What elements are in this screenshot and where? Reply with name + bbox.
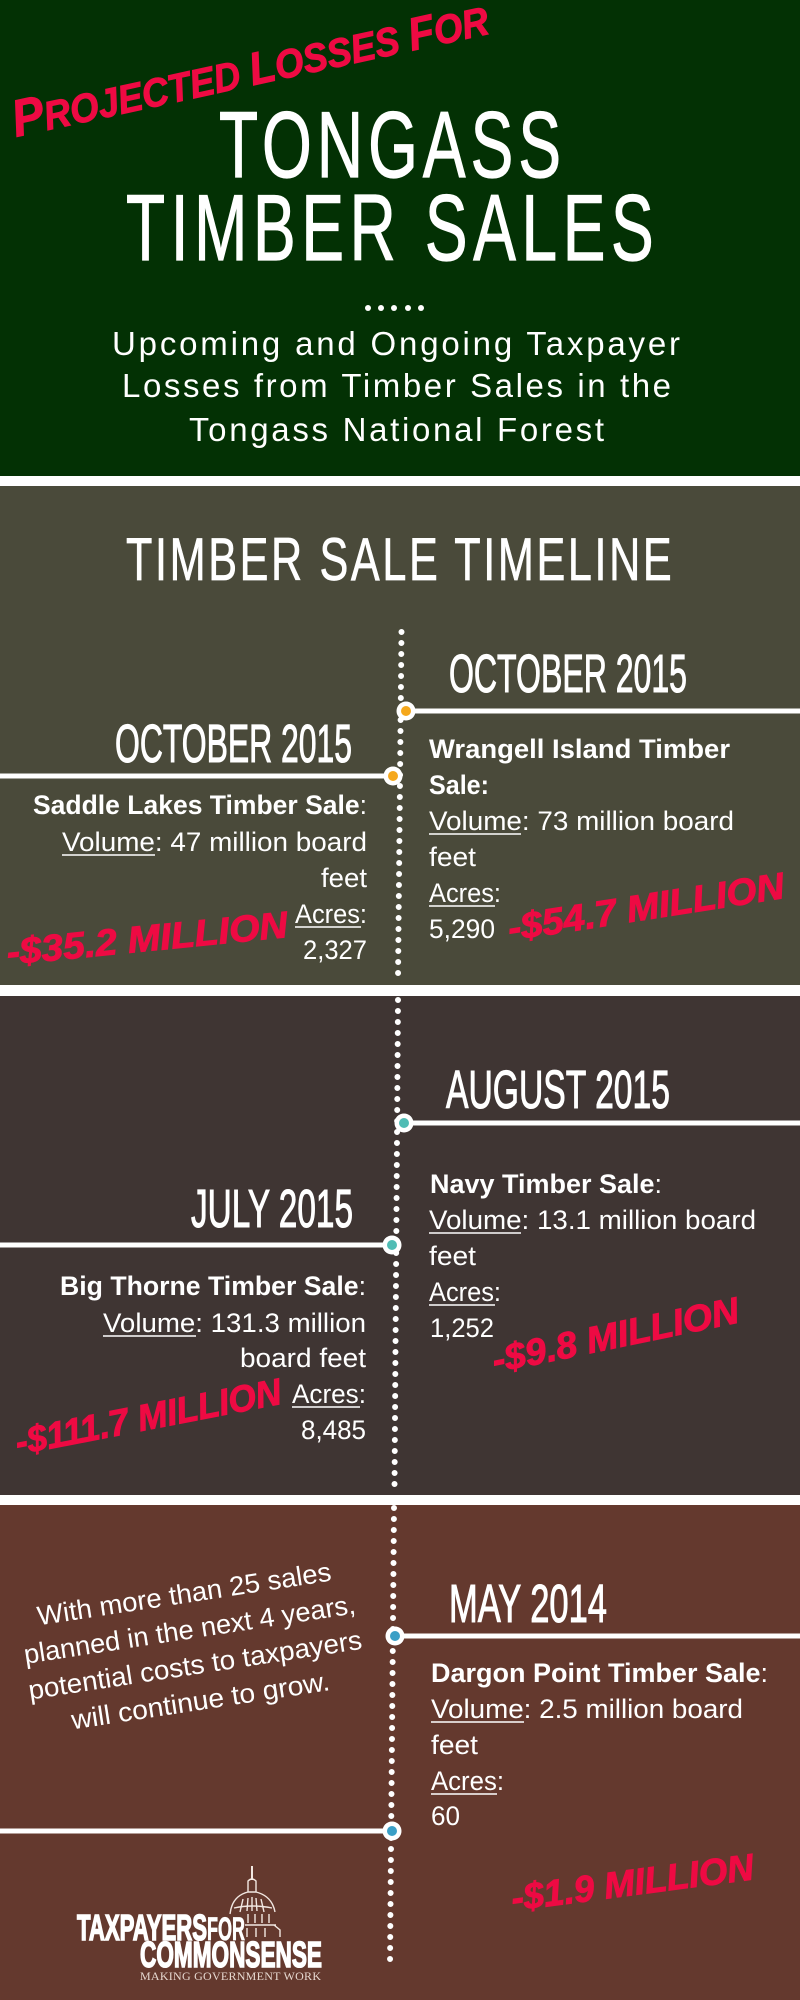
entry: Navy: feet xyxy=(429,1241,477,1271)
title xyxy=(126,93,654,281)
entry: Saddle Lakes: feet xyxy=(321,863,367,893)
panel: timeline 2015 October xyxy=(0,486,800,985)
timeline dotted line xyxy=(398,632,402,978)
subtitle: Upcoming and Ongoing Taxpayer xyxy=(112,325,680,362)
entry: Navy: Acres: xyxy=(429,1277,501,1307)
callout: more sales planned: With more than 25 sales xyxy=(35,1557,333,1631)
entry: Saddle Lakes: OCTOBER 2015 xyxy=(115,714,352,774)
entry: Dargon Point: Volume: 2.5 million board xyxy=(431,1694,743,1724)
entry: Wrangell Island: Volume: 73 million board xyxy=(429,806,734,836)
entry: Navy: 1,252 xyxy=(430,1313,494,1343)
logo: Taxpayers for Common Sense: COMMONSENSE xyxy=(140,1934,322,1975)
entry: Wrangell Island: Sale: xyxy=(429,770,489,800)
callout: more sales planned: will continue to grow. xyxy=(68,1666,332,1736)
entry: Saddle Lakes: Acres: xyxy=(295,899,367,929)
entry: Dargon Point: 60 xyxy=(431,1801,460,1831)
entry: Navy: Volume: 13.1 million board xyxy=(429,1205,756,1235)
title: TONGASS xyxy=(219,93,561,198)
entry: Dargon Point: Acres: xyxy=(431,1766,504,1796)
logo: Taxpayers for Common Sense xyxy=(77,1866,322,1983)
loss: Navy: -$9.8 MILLION xyxy=(488,1290,744,1381)
entry: Saddle Lakes xyxy=(0,714,402,965)
entry: Dargon Point: Dargon Point Timber Sale: xyxy=(431,1658,768,1688)
panel: timeline mid 2015 xyxy=(0,996,800,1495)
entry: Wrangell Island: Wrangell Island Timber xyxy=(429,734,730,764)
entry: Navy: Navy Timber Sale: xyxy=(430,1169,662,1199)
entry: Big Thorne: Volume: 131.3 million xyxy=(103,1308,366,1338)
heading: timber sale timeline: TIMBER SALE TIMELINE xyxy=(126,527,672,594)
handwritten overline: projected losses: PROJECTED LOSSES FOR xyxy=(6,0,494,149)
loss: Big Thorne: -$111.7 MILLION xyxy=(12,1371,286,1463)
loss: Saddle Lakes: -$35.2 MILLION xyxy=(5,904,291,973)
connector line with node xyxy=(0,1822,402,1840)
timeline dotted line xyxy=(394,1000,398,1488)
callout: more sales planned xyxy=(15,1554,369,1741)
icon: capitol dome xyxy=(230,1866,280,1937)
subtitle: Tongass National Forest xyxy=(189,411,604,448)
subtitle xyxy=(112,325,680,448)
entry: Navy: AUGUST 2015 xyxy=(446,1060,670,1120)
entry: Big Thorne: Acres: xyxy=(292,1379,366,1409)
entry: Wrangell Island: 5,290 xyxy=(429,914,495,944)
timeline dotted line xyxy=(390,1508,394,1963)
entry: Wrangell Island: feet xyxy=(429,842,477,872)
entry: Wrangell Island xyxy=(396,644,800,944)
callout: more sales planned: planned in the next 4 years, xyxy=(22,1589,357,1670)
subtitle: Losses from Timber Sales in the xyxy=(122,367,671,404)
loss: Dargon Point: -$1.9 MILLION xyxy=(509,1846,757,1919)
title: TIMBER SALES xyxy=(126,176,654,281)
entry: Big Thorne xyxy=(0,1179,402,1445)
entry: Dargon Point xyxy=(386,1574,800,1831)
entry: Saddle Lakes: Volume: 47 million board xyxy=(62,827,367,857)
entry: Wrangell Island: Acres: xyxy=(429,878,501,908)
entry: Big Thorne: board feet xyxy=(240,1343,367,1373)
logo: Taxpayers for Common Sense: TAXPAYERS xyxy=(77,1907,207,1948)
entry: Navy xyxy=(394,1060,800,1343)
loss: Wrangell Island: -$54.7 MILLION xyxy=(505,865,788,949)
callout: more sales planned: potential costs to taxpayers xyxy=(26,1625,364,1706)
dotted divider xyxy=(365,305,424,311)
entry: Dargon Point: MAY 2014 xyxy=(449,1574,607,1634)
entry: Saddle Lakes: Saddle Lakes Timber Sale: xyxy=(33,790,367,820)
entry: Big Thorne: Big Thorne Timber Sale: xyxy=(60,1271,366,1301)
logo: Taxpayers for Common Sense: MAKING GOVERNMENT WORK xyxy=(140,1969,321,1983)
logo: Taxpayers for Common Sense: FOR xyxy=(207,1911,245,1947)
entry: Big Thorne: JULY 2015 xyxy=(191,1179,353,1239)
entry: Big Thorne: 8,485 xyxy=(301,1415,366,1445)
entry: Dargon Point: feet xyxy=(431,1730,479,1760)
panel: timeline 2014 and footer xyxy=(0,1505,800,2000)
panel: header xyxy=(0,0,800,476)
entry: Saddle Lakes: 2,327 xyxy=(303,935,367,965)
